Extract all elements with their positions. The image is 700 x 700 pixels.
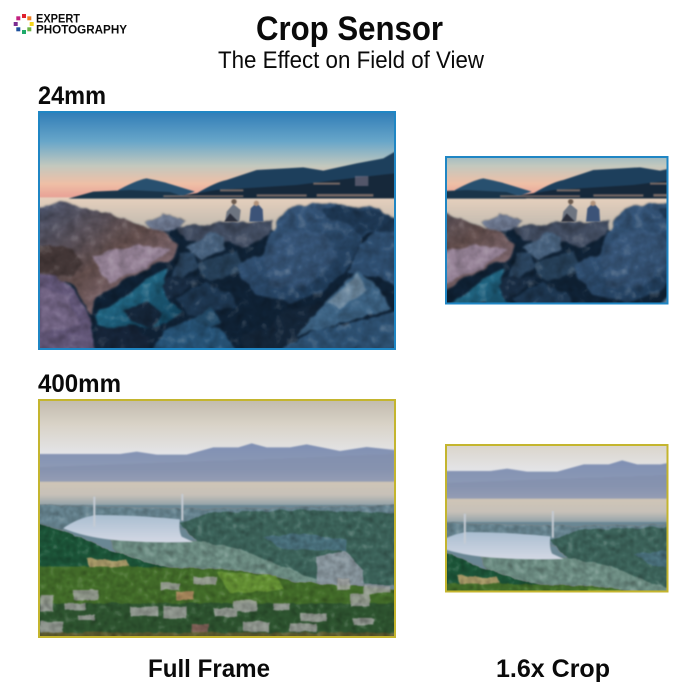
logo wordmark <box>36 12 127 36</box>
logo wordmark: PHOTOGRAPHY <box>36 22 127 36</box>
logo: Expert Photography <box>14 12 127 36</box>
caption: 1.6x Crop: 1.6x Crop <box>496 655 610 683</box>
subtitle: The Effect on Field of View <box>218 47 485 74</box>
icon: colour ring <box>14 14 34 34</box>
logo wordmark: EXPERT <box>36 12 81 26</box>
title: Crop Sensor <box>256 10 443 48</box>
photo: 24mm full frame coast <box>30 110 407 355</box>
caption: Full Frame: Full Frame <box>148 655 270 683</box>
photo: 400mm 1.6x crop valley <box>445 444 668 592</box>
label: 400mm: 400mm <box>38 370 121 398</box>
label: 24mm: 24mm <box>38 82 106 110</box>
photo: 400mm full frame valley <box>33 397 403 643</box>
photo: 24mm 1.6x crop coast <box>445 156 668 304</box>
